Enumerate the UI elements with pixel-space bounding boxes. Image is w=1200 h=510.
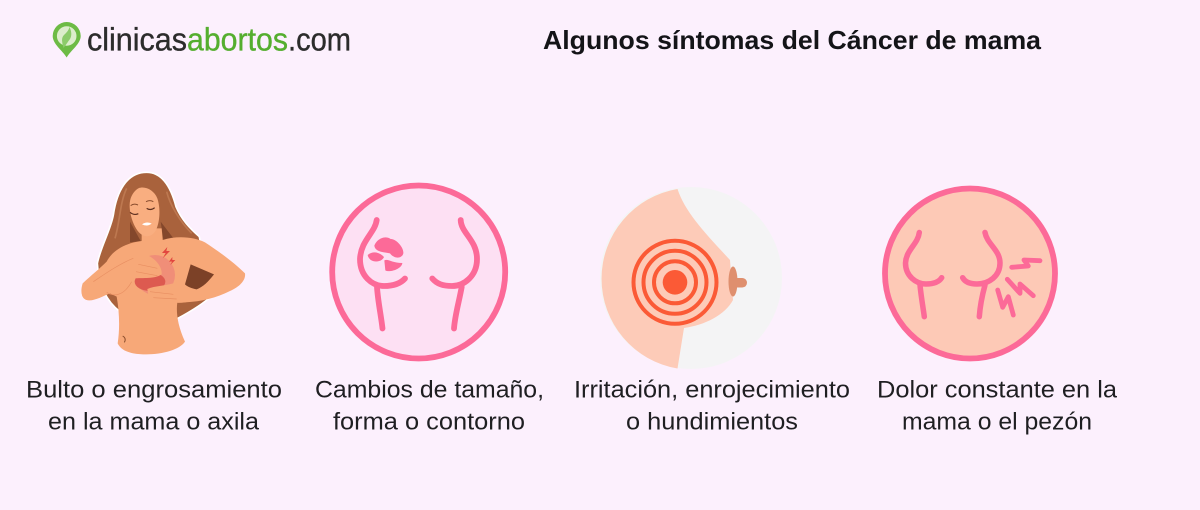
logo wordmark: clinicas <box>87 22 187 58</box>
label <box>315 376 544 436</box>
label: mama o el pezón <box>902 408 1092 436</box>
label: o hundimientos <box>626 408 798 436</box>
icon: breasts with blotches <box>332 186 505 358</box>
hand on lower breast <box>147 282 196 303</box>
title: Algunos síntomas del Cáncer de mama <box>543 25 1042 55</box>
redness area <box>135 255 175 295</box>
panel: lump symptom <box>26 172 282 436</box>
illustration: woman examining her breast <box>81 172 245 354</box>
hair strands <box>115 188 192 238</box>
panel: irritation <box>574 187 850 436</box>
label: Dolor constante en la <box>877 376 1118 404</box>
panel: shape changes <box>315 186 544 436</box>
panel: constant pain <box>877 188 1118 436</box>
label: Cambios de tamaño, <box>315 376 544 404</box>
logo wordmark: abortos <box>187 22 288 58</box>
logo wordmark: .com <box>288 22 351 58</box>
eyes, brows and mouth <box>130 208 155 214</box>
navel <box>123 336 125 342</box>
label <box>877 376 1118 436</box>
label: Bulto o engrosamiento <box>26 376 282 404</box>
label <box>574 376 850 436</box>
icon: breast with target rings <box>600 187 782 369</box>
hand on upper breast <box>82 253 162 300</box>
logo <box>53 22 351 58</box>
icon: breasts with lightning bolts <box>885 188 1055 358</box>
pain marks <box>162 247 175 265</box>
label: en la mama o axila <box>48 408 260 436</box>
nipple <box>728 266 738 296</box>
icon: location pin with leaf <box>53 22 81 58</box>
dark hair beside neck <box>130 222 174 242</box>
label: Irritación, enrojecimiento <box>574 376 850 404</box>
label: forma o contorno <box>333 408 525 436</box>
torso and arms <box>81 228 245 354</box>
under-breast contour <box>107 282 132 295</box>
blotches <box>368 237 403 271</box>
pain bolts <box>998 260 1040 315</box>
logo wordmark <box>87 22 351 58</box>
window between arm and torso <box>185 264 214 289</box>
face <box>130 188 159 236</box>
label <box>26 376 282 436</box>
hair <box>97 172 214 319</box>
